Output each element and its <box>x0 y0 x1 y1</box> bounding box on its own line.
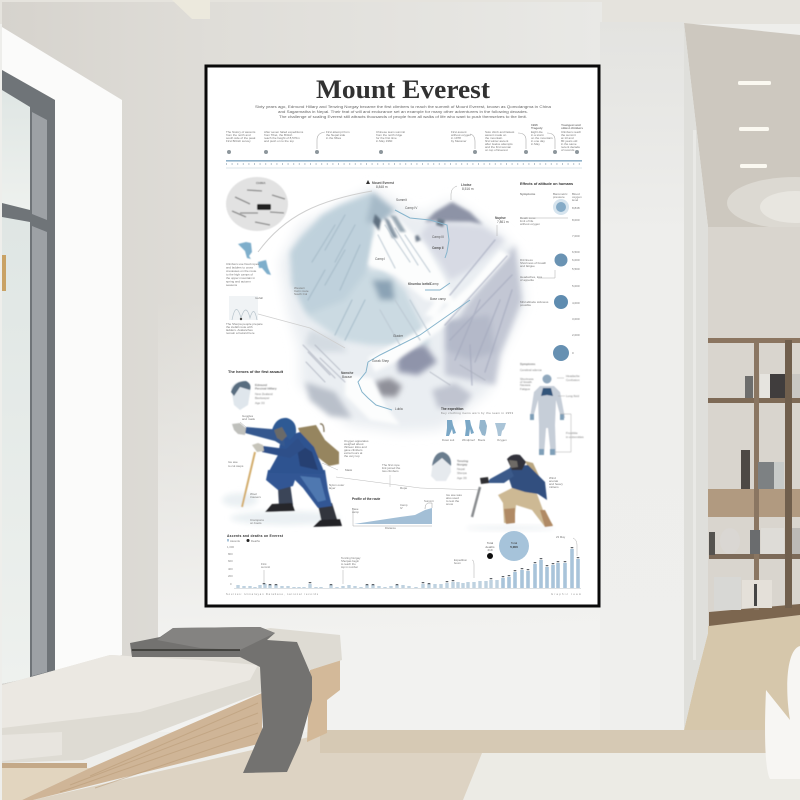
hood and face <box>507 454 526 470</box>
Tenzing labels: Ice axe was <box>446 493 462 497</box>
diagram: oxygen route: the icefall route with <box>226 325 253 329</box>
portrait: Tenzing Norgay: Norgay <box>457 462 468 466</box>
portrait: Edmund Hillary: New Zealand <box>255 392 273 396</box>
human body figure <box>520 362 584 455</box>
tiled floor of back room <box>684 615 800 730</box>
diagram: oxygen route <box>226 296 263 335</box>
human body figure: Headache <box>566 374 580 378</box>
portrait: Tenzing Norgay: Age 39 <box>457 476 467 480</box>
mountain labels: Lhotse <box>461 183 472 187</box>
gloves <box>232 423 246 435</box>
mountain labels: Camp <box>430 282 439 286</box>
Hillary labels: on boots <box>250 521 262 525</box>
icons: rope climbers <box>238 242 271 275</box>
y axis labels: 400 <box>228 567 233 571</box>
window reveal <box>2 27 122 672</box>
window frame and glass <box>2 70 55 684</box>
altitude effects panel: 8,848 <box>572 206 580 210</box>
wall column <box>600 22 684 730</box>
source line: Sources: Himalayan Database, national records <box>226 592 319 596</box>
human body figure: Lung fluid <box>566 394 579 398</box>
altitude effects panel: oxygen <box>572 195 582 199</box>
bubble comparison: 219 <box>487 548 493 552</box>
Hillary labels: Ice axe <box>228 460 238 464</box>
equipment: the expedition: The expedition <box>441 407 464 411</box>
altitude effects panel: possible <box>520 303 531 307</box>
callout line to icefall <box>258 314 345 348</box>
y axis labels <box>227 545 234 586</box>
intro text: The challenge of scaling Everest still attracts thousands of people from all walks of life who want to push themselves to the limit. <box>279 115 527 119</box>
mountain labels: Mount Everest <box>372 181 395 185</box>
altitude effects panel: Symptoms <box>520 192 536 196</box>
right lower leg and boot <box>318 503 338 524</box>
timeline: Eight die <box>531 130 543 134</box>
Hillary labels: extra hours at <box>344 451 363 455</box>
profile of the route chart: Distance <box>385 526 396 530</box>
equipment: the expedition: Oxygen <box>497 438 507 442</box>
climbing route <box>358 210 470 410</box>
back room wall <box>708 227 800 627</box>
mountain labels: Camp I <box>375 257 385 261</box>
altitude effects panel: 5,000 <box>572 284 580 288</box>
portrait: Edmund Hillary: Edmund <box>255 383 267 387</box>
text: climbing notes: Climbers use fixed ropes <box>226 262 260 266</box>
floor <box>33 730 800 800</box>
timeline: Tragedy <box>531 126 543 130</box>
side wall returns <box>684 23 708 730</box>
intro text: Sixty years ago, Edmund Hillary and Tenzing Norgay became the first climbers to reach the summit of Mount Everest, known as Qomolangma in China <box>255 105 551 109</box>
Hillary labels: layer <box>329 486 336 490</box>
timeline: Chinese team summit <box>376 130 405 134</box>
diagram: oxygen route: remain a hazard here <box>226 331 255 335</box>
timeline: in one day <box>531 139 545 143</box>
mountain illustration <box>280 180 525 432</box>
torso <box>268 432 325 474</box>
Tenzing labels: Wind <box>549 476 556 480</box>
altitude effects panel: 2,000 <box>572 333 580 337</box>
mattress <box>2 628 342 763</box>
text: climbing notes: the upper mountain in <box>226 276 255 280</box>
timeline: reach the height of 8,570m <box>264 136 300 140</box>
profile of the route chart: Profile of the route <box>352 497 381 501</box>
timeline: in the fifties <box>326 136 342 140</box>
portrait: Edmund Hillary <box>231 381 277 410</box>
timeline: south side of the peak <box>226 136 256 140</box>
title: Mount Everest <box>316 75 490 104</box>
mountain labels: Namche <box>341 371 354 375</box>
chart annotations: boom <box>454 561 462 565</box>
heading: heroes of the first assault: The heroes of the first assault <box>228 369 284 374</box>
blanket and pillow <box>130 627 312 773</box>
climber: Tenzing <box>465 454 555 531</box>
altitude effects panel: Effects of altitude on humans <box>520 182 573 186</box>
legs <box>266 470 332 508</box>
altitude effects panel: Death zone: <box>520 216 536 220</box>
dark rocks <box>373 214 445 242</box>
mountain labels: Khumbu Icefall <box>408 282 431 286</box>
timeline: without oxygen <box>451 133 471 137</box>
y axis labels: 0 <box>230 582 232 586</box>
altitude effects panel: 4,000 <box>572 301 580 305</box>
altitude effects panel: 6,500 <box>572 250 580 254</box>
equipment: the expedition: Windproof <box>462 438 475 442</box>
chart annotations <box>261 535 566 569</box>
chart annotations: Tenzing Norgay <box>341 556 361 560</box>
altitude effects panel: 0 <box>572 351 574 355</box>
timeline: Climbers reach <box>561 130 582 134</box>
equipment: the expedition: Down suit <box>442 438 455 442</box>
timeline: 1996 <box>531 123 538 127</box>
human body figure: Confusion <box>566 378 580 382</box>
expedition figures <box>446 420 506 436</box>
y axis labels: 200 <box>228 574 233 578</box>
white chair <box>765 646 800 779</box>
altitude effects panel: limit of life <box>520 219 534 223</box>
mountain labels: Glacier <box>393 334 404 338</box>
chart legend: Ascents <box>230 539 241 543</box>
timeline: in 1978 <box>451 136 461 140</box>
timeline: First ascent <box>451 130 467 134</box>
y axis labels: 600 <box>228 559 233 563</box>
chart annotations: to reach the <box>341 562 356 566</box>
portrait: Edmund Hillary: Age 33 <box>255 401 265 405</box>
timeline: recent decade <box>561 145 580 149</box>
lower arm <box>262 438 305 458</box>
bookshelves <box>708 338 800 626</box>
timeline: of records <box>561 148 575 152</box>
altitude effects panel: of appetite <box>520 278 534 282</box>
timeline: the mountain <box>485 136 503 140</box>
Hillary labels: gave climbers <box>344 448 363 452</box>
altitude effects panel: 7,000 <box>572 234 580 238</box>
mountain labels: Camp IV <box>405 206 418 210</box>
timeline: First British survey <box>226 139 251 143</box>
Hillary labels: Mask <box>345 468 353 472</box>
axis baseline <box>234 588 581 590</box>
chart annotations: First <box>261 562 267 566</box>
altitude effects panel: without oxygen <box>520 222 540 226</box>
mountain labels: Lukla <box>395 407 403 411</box>
jacket <box>508 465 547 500</box>
bubble comparison: 5,000 <box>510 545 518 549</box>
Hillary labels <box>228 414 480 525</box>
hood <box>272 418 296 440</box>
Tenzing labels: mittens <box>549 485 559 489</box>
mountain labels: 7,861 m <box>497 220 509 224</box>
wood bench base <box>2 660 340 800</box>
timeline: oldest climbers <box>561 126 583 130</box>
timeline: Youngest and <box>561 123 581 127</box>
text: climbing notes: South Col <box>294 292 308 296</box>
Tenzing labels: to test the <box>446 499 460 503</box>
timeline: in May <box>531 142 540 146</box>
intro text: and Sagarmatha in Nepal. Their feat of will and endurance set an example for many other adventurers in the following decades. <box>278 110 528 114</box>
snow fields <box>345 216 510 425</box>
portrait: Tenzing Norgay: Sherpa <box>457 471 467 475</box>
timeline: ascent made on <box>485 133 507 137</box>
timeline <box>226 123 583 168</box>
ridge strokes <box>303 215 512 385</box>
y axis labels: 800 <box>228 552 233 556</box>
altitude effects panel: pressure <box>553 195 565 199</box>
text: climbing notes: Cwm route <box>294 289 309 293</box>
chart annotations: Sherpas begin <box>341 559 359 563</box>
death markers <box>264 547 578 585</box>
human body figure: Fatigue <box>520 387 530 391</box>
chart annotations: 23 May <box>556 535 566 539</box>
chart annotations: Expedition <box>454 558 468 562</box>
human body figure: of breath <box>520 380 532 384</box>
portrait: Tenzing Norgay <box>431 452 468 481</box>
bubble comparison: Total <box>487 541 493 545</box>
diagram: oxygen route: The Sherpa people prepare <box>226 322 263 326</box>
portrait: Tenzing Norgay: Tenzing <box>457 459 468 463</box>
mountain labels: Summit <box>396 198 407 202</box>
intro text <box>255 105 551 119</box>
human body figure: Nausea <box>520 383 531 387</box>
y axis labels: 1,000 <box>227 545 234 549</box>
timeline: Solo climb and fastest <box>485 130 515 134</box>
ascents and deaths bar chart: Ascents and deaths on Everest <box>227 534 284 538</box>
Hillary labels: thirteen kilos and <box>344 445 367 449</box>
human body figure: Shortness <box>520 377 534 381</box>
left lower leg and boot <box>278 483 293 507</box>
chart annotations: top in number <box>341 565 358 569</box>
soft mountain glow <box>280 188 525 432</box>
Tenzing labels: anorak <box>549 479 559 483</box>
mountain labels: Base camp <box>430 297 446 301</box>
profile of the route chart: Camp <box>400 503 408 507</box>
altitude effects panel: 5,500 <box>572 267 580 271</box>
Tenzing labels: also used <box>446 496 459 500</box>
timeline: First attempt from <box>326 130 350 134</box>
bubble comparison <box>485 531 529 561</box>
snow shadow <box>222 493 340 525</box>
west face <box>290 192 430 345</box>
legs <box>498 488 553 527</box>
equipment: the expedition <box>441 407 513 442</box>
human body figure: in extremities <box>566 435 584 439</box>
chart annotations: summit <box>261 565 270 569</box>
text: climbing notes: spring and autumn <box>226 280 251 284</box>
profile of the route chart: IV <box>400 506 403 510</box>
timeline: from the north ridge <box>376 133 403 137</box>
backpack <box>525 461 540 478</box>
diagram: oxygen route: ladders. Avalanches <box>226 328 253 332</box>
mountain labels: Bazaar <box>342 375 353 379</box>
Hillary labels: The first rope <box>382 463 400 467</box>
timeline: and the first woman <box>485 145 512 149</box>
trekking pole <box>472 487 480 517</box>
timeline: from Tibet, the British <box>264 133 293 137</box>
altitude effects panel: 6,000 <box>572 258 580 262</box>
altitude effects panel: Shortness of breath <box>520 261 547 265</box>
portrait: Edmund Hillary: Beekeeper <box>255 396 270 400</box>
ice axe <box>242 452 255 507</box>
glove <box>480 477 489 484</box>
mountain labels: Gorak Shep <box>372 359 389 363</box>
timeline: on the mountain <box>531 136 553 140</box>
rug <box>463 753 800 800</box>
upper arm <box>245 427 285 447</box>
timeline: After seven failed expeditions <box>264 130 304 134</box>
altitude effects panel: level <box>572 198 579 202</box>
Hillary labels: and mask <box>242 417 256 421</box>
Hillary labels: Crampons <box>250 518 264 522</box>
atmosphere circles <box>553 199 569 361</box>
human body figure: Frostbite <box>566 431 578 435</box>
equipment: the expedition: Key clothing items worn by the team in 1953 <box>441 411 513 415</box>
Hillary labels: Wool <box>250 492 257 496</box>
altitude effects panel <box>520 182 582 361</box>
mountain labels: Camp III <box>432 235 444 239</box>
Hillary labels: Goggles <box>242 414 254 418</box>
Tenzing labels <box>446 476 563 506</box>
timeline: from the north and <box>226 133 251 137</box>
altitude effects panel: and fatigue <box>520 264 535 268</box>
altitude effects panel: Dizziness <box>520 258 533 262</box>
Hillary labels: the very top <box>344 454 360 458</box>
diagram: oxygen route: Icefall <box>255 296 263 300</box>
profile of the route chart: Summit <box>424 499 434 503</box>
bubble comparison: Total <box>511 541 517 545</box>
Hillary labels: to cut steps <box>228 464 244 468</box>
ascents and deaths bar chart <box>226 531 581 596</box>
text: climbing notes: seasons <box>226 283 238 287</box>
Hillary labels: Rope <box>400 486 408 490</box>
text: climbing notes <box>226 262 309 296</box>
timeline: the summit <box>561 133 576 137</box>
timeline: 80 years old <box>561 139 578 143</box>
Hillary labels: two climbers <box>382 469 399 473</box>
mountain labels: 8,516 m <box>462 187 474 191</box>
timeline: at 13 and <box>561 136 574 140</box>
mountain labels: Camp II <box>432 246 444 250</box>
callout arc to summit <box>258 191 372 252</box>
equipment: the expedition: Boots <box>478 438 486 442</box>
timeline: first winter ascent <box>485 139 509 143</box>
Hillary labels: link joined the <box>382 466 401 470</box>
portrait: Tenzing Norgay: Nepal <box>457 467 465 471</box>
text: climbing notes: and ladders to cross <box>226 266 254 270</box>
human body figure: Symptoms <box>520 362 536 366</box>
climber: Hillary <box>222 418 342 527</box>
timeline: for the first time <box>376 136 397 140</box>
altitude effects panel: 3,000 <box>572 317 580 321</box>
mountain labels <box>341 180 509 411</box>
human body figure: Cerebral edema <box>520 368 542 372</box>
Tenzing labels: snow <box>446 502 454 506</box>
ascents and deaths bar chart: Graphic team <box>551 592 581 596</box>
profile of the route chart: Base <box>352 507 359 511</box>
text: climbing notes: Western <box>294 286 305 290</box>
timeline: the Nepal side <box>326 133 346 137</box>
mountain labels: Nuptse <box>495 216 506 220</box>
mountain labels: 8,848 m <box>376 185 388 189</box>
chart legend <box>227 539 260 543</box>
timeline: and push on to the top <box>264 139 294 143</box>
chart legend: Deaths <box>251 539 260 543</box>
Hillary labels: Oxygen apparatus <box>344 439 369 443</box>
timeline: after twelve attempts <box>485 142 513 146</box>
locator map: CHINA <box>256 181 266 185</box>
right peak and face <box>425 202 483 225</box>
locator map <box>226 177 288 231</box>
framed poster <box>206 66 599 606</box>
text: climbing notes: to the high camps of <box>226 272 253 276</box>
ceiling with lights <box>684 23 800 238</box>
backpack <box>298 425 339 466</box>
profile of the route chart: camp <box>352 510 359 514</box>
Hillary labels: weighed about <box>344 442 364 446</box>
altitude effects panel: Barometric <box>553 192 568 196</box>
timeline: on top of Everest <box>485 148 508 152</box>
Tenzing labels: and heavy <box>549 482 563 486</box>
altitude effects panel: 8,000 <box>572 218 580 222</box>
text: climbing notes: crevasses on the route <box>226 269 257 273</box>
arm <box>487 468 514 483</box>
timeline: in a storm <box>531 133 545 137</box>
bubble comparison: deaths <box>485 545 495 549</box>
timeline: in May 1960 <box>376 139 393 143</box>
timeline: The history of ascents <box>226 130 256 134</box>
altitude effects panel: Mild altitude sickness <box>520 300 549 304</box>
timeline: in the same <box>561 142 577 146</box>
face <box>274 427 287 441</box>
Hillary labels: trousers <box>250 495 261 499</box>
Hillary labels: Nylon outer <box>329 483 344 487</box>
altitude effects panel: Headaches, loss <box>520 275 543 279</box>
portrait: Edmund Hillary: Percival Hillary <box>255 386 277 390</box>
ascent bars <box>238 580 497 588</box>
altitude effects panel: Blood <box>572 192 580 196</box>
timeline: by Messner <box>451 139 467 143</box>
profile of the route chart <box>352 497 434 530</box>
